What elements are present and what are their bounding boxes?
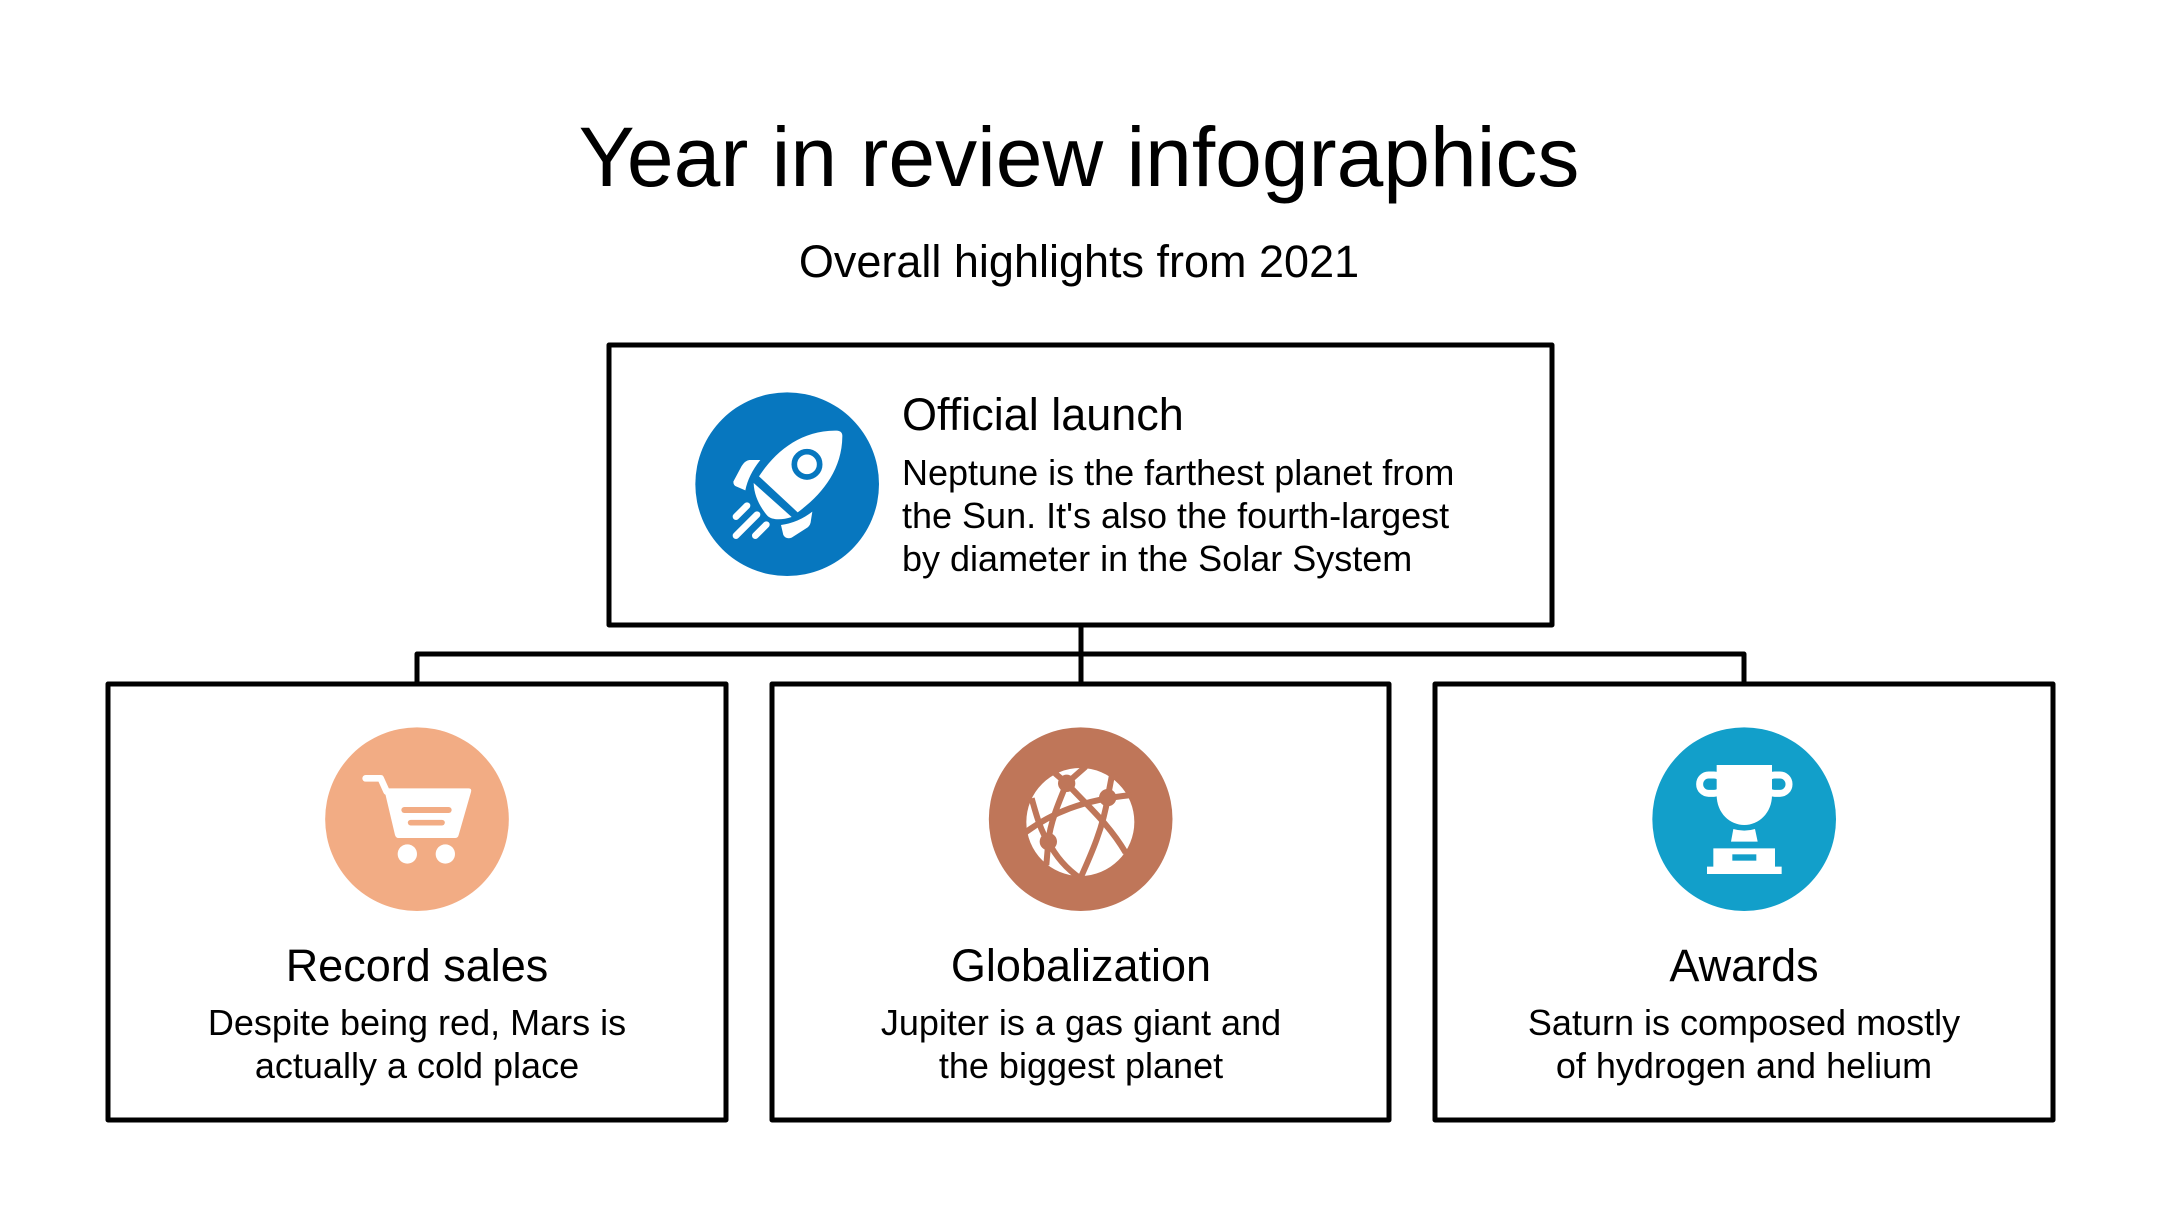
text: official launch description: by diameter in the Solar System — [902, 538, 1412, 579]
text: record sales description: actually a cold place — [255, 1045, 579, 1086]
panel: official launch — [609, 345, 1552, 625]
heading: record sales: Record sales — [286, 940, 548, 991]
panel: globalization — [772, 684, 1389, 1120]
text: globalization description: the biggest planet — [939, 1045, 1223, 1086]
icon: trophy — [1652, 727, 1836, 911]
icon: shopping cart — [325, 727, 509, 911]
text: official launch description: Neptune is the farthest planet from — [902, 452, 1454, 493]
text: awards description: Saturn is composed mostly — [1528, 1002, 1960, 1043]
title: Year in review infographics — [579, 110, 1579, 204]
subtitle: Overall highlights from 2021 — [799, 236, 1359, 287]
text: globalization description: Jupiter is a gas giant and — [881, 1002, 1281, 1043]
heading: awards: Awards — [1669, 940, 1819, 991]
heading: official launch: Official launch — [902, 389, 1184, 440]
text: record sales description: Despite being red, Mars is — [208, 1002, 626, 1043]
panel: record sales — [108, 684, 726, 1120]
icon: globe network — [989, 727, 1172, 911]
text: awards description: of hydrogen and helium — [1556, 1045, 1932, 1086]
icon: rocket — [695, 392, 879, 576]
heading: globalization: Globalization — [951, 940, 1211, 991]
panel: awards — [1435, 684, 2053, 1120]
connector lines — [417, 625, 1744, 683]
text: official launch description: the Sun. It's also the fourth-largest — [902, 495, 1449, 536]
